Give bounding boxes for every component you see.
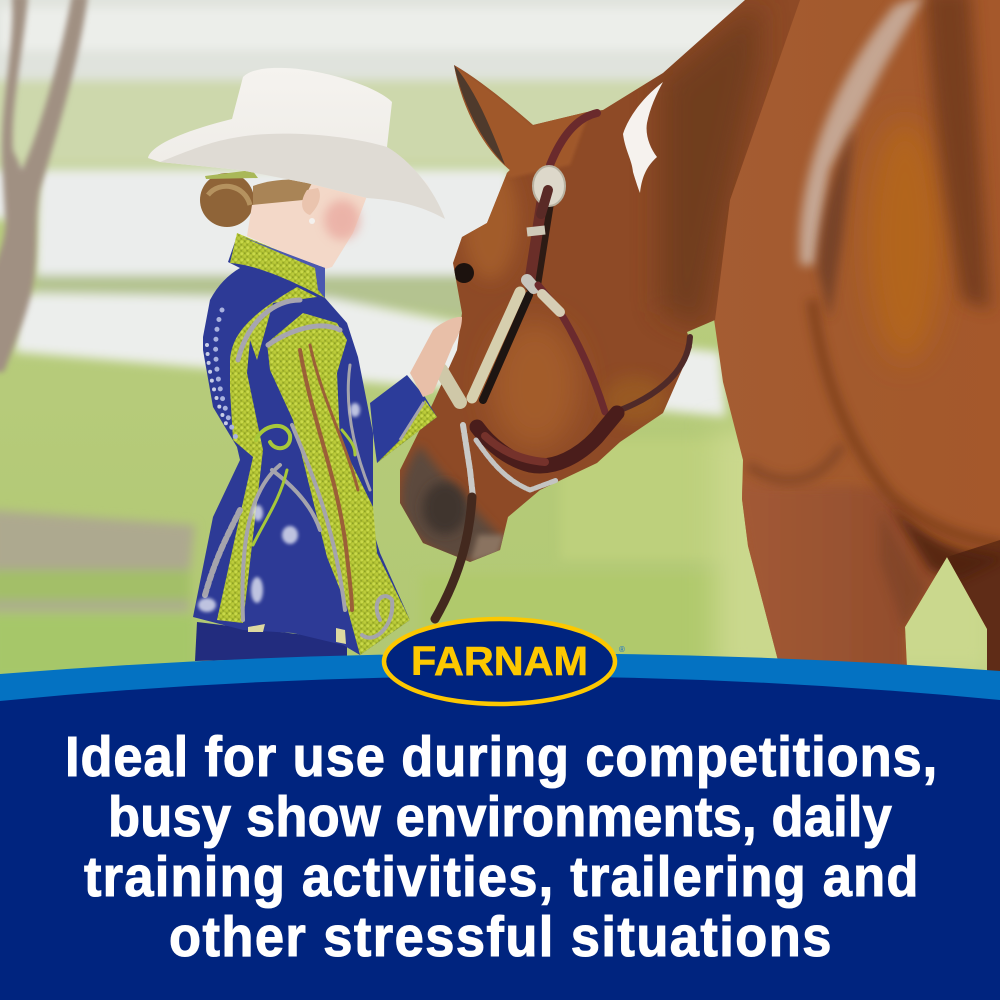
jacket	[193, 233, 410, 655]
white shoulder trim	[216, 310, 237, 440]
orange flank glow	[867, 120, 943, 360]
jaw gold tone	[603, 376, 667, 424]
chain	[476, 440, 557, 490]
maroon cheek strap	[538, 285, 605, 412]
noseband	[477, 413, 617, 466]
pants	[195, 622, 347, 661]
cheek highlight	[490, 320, 580, 450]
ear	[454, 65, 590, 178]
white star marking	[623, 82, 663, 193]
face and neck	[247, 183, 367, 270]
lead rope	[435, 497, 472, 619]
hair bun	[200, 170, 325, 227]
fold lines	[812, 300, 1000, 545]
navy text panel	[0, 676, 1000, 1000]
photo background	[0, 0, 1000, 700]
Farnam logo: FARNAM	[411, 638, 588, 684]
cowboy hat	[148, 68, 445, 219]
Farnam logo: ®	[619, 645, 625, 654]
concho	[533, 166, 565, 206]
muzzle	[401, 445, 504, 562]
dark crease beside streak	[818, 125, 855, 320]
headline text: training activities, trailering and	[84, 844, 918, 908]
silver nose strap	[483, 295, 529, 400]
light blue curved band	[0, 653, 1000, 1000]
gold square studs	[248, 624, 346, 644]
dark vertical crease	[925, 0, 990, 310]
headline text: other stressful situations	[169, 904, 831, 968]
headline text: Ideal for use during competitions,	[65, 724, 937, 788]
headline text: busy show environments, daily	[108, 784, 892, 848]
sleeve and cuff	[370, 375, 437, 463]
pale mane streak	[799, 0, 925, 265]
throat strap	[612, 337, 690, 413]
leg shading	[880, 522, 922, 623]
grass beside horse legs	[715, 430, 1000, 680]
Farnam logo	[384, 619, 625, 704]
front leg	[742, 482, 946, 665]
collar	[230, 233, 325, 298]
left sequin panel	[217, 287, 317, 623]
white fabric dabs	[198, 403, 360, 612]
horse head and neck	[390, 0, 810, 580]
jacket base	[193, 236, 410, 655]
headline text	[65, 724, 937, 968]
halter	[435, 113, 690, 619]
eye	[454, 263, 474, 283]
hand	[410, 317, 462, 397]
tree	[0, 0, 88, 372]
central sequin panel	[267, 313, 410, 655]
girl	[148, 68, 462, 661]
neck shade	[660, 0, 760, 330]
rear leg	[947, 540, 1000, 680]
horse body	[700, 0, 1000, 690]
crown strap	[550, 113, 597, 165]
cheek strap	[533, 190, 548, 285]
swirl embellishments	[205, 300, 392, 638]
